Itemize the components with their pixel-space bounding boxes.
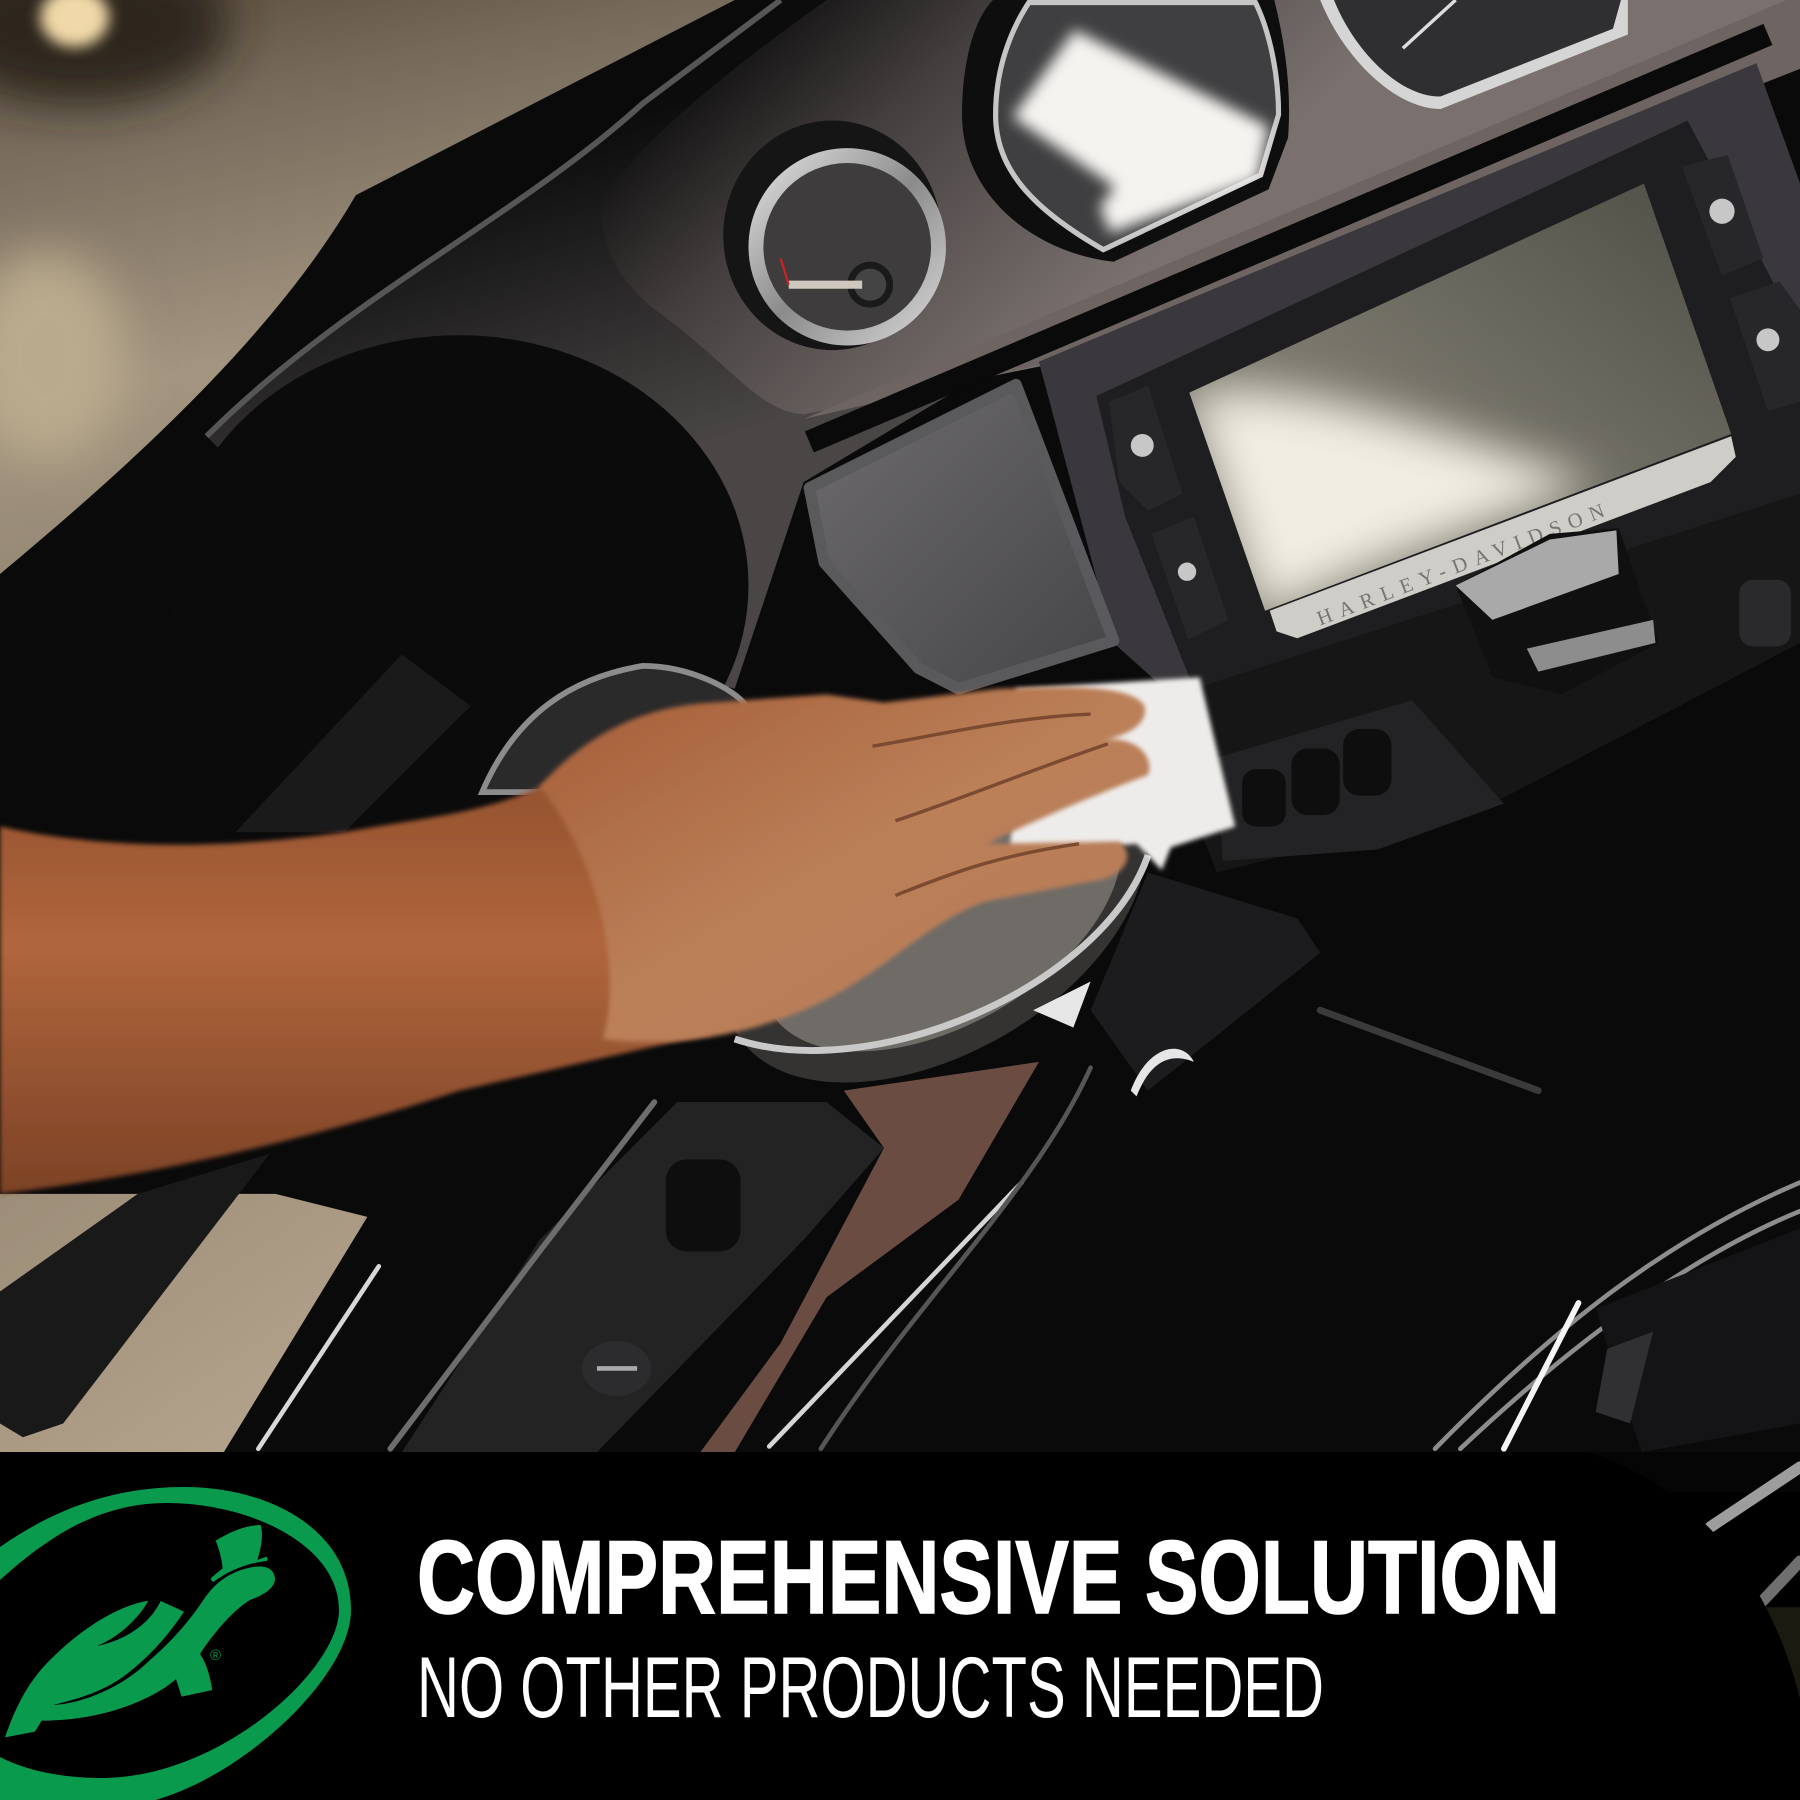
display bezel outer — [1039, 63, 1800, 695]
screen logo strip — [1270, 436, 1736, 638]
screen bezel — [1096, 121, 1800, 689]
logo: green turtle ring — [0, 1487, 351, 1800]
screen glare — [1188, 390, 1596, 614]
arm — [0, 781, 712, 1194]
bright highlight streaks — [258, 1010, 1800, 1601]
trim line — [207, 0, 781, 436]
upper panel — [600, 0, 1800, 414]
left switch housing and chrome bar — [235, 654, 746, 832]
ignition switch chrome — [1456, 528, 1659, 695]
small fuel gauge — [723, 121, 946, 350]
black caption panel — [0, 1452, 1800, 1800]
floor lower left — [0, 1182, 390, 1452]
dark area bottom right — [1722, 1607, 1800, 1800]
control switches — [1242, 580, 1791, 827]
speaker — [170, 335, 748, 836]
screen logo strip: HARLEY-DAVIDSON — [1314, 497, 1615, 630]
black stripe below upper panel — [809, 34, 1768, 442]
top right gauge — [1320, 0, 1628, 109]
screen buttons — [1109, 155, 1800, 639]
right dark reflections — [1504, 1228, 1800, 1452]
central console panel — [402, 1102, 884, 1452]
icon: turtle with top hat — [5, 1525, 275, 1737]
chrome ring around headlight mount — [669, 686, 1202, 1151]
screen — [1189, 184, 1731, 611]
fender chrome — [1033, 872, 1320, 1096]
fairing gray surface — [207, 0, 1033, 689]
white cloth — [1010, 677, 1235, 870]
registered mark: ® — [210, 1647, 221, 1664]
button icons — [1131, 199, 1779, 581]
background wall — [0, 0, 804, 643]
upper right panel strip — [804, 0, 1800, 419]
reflection of hand on tank — [700, 1062, 1039, 1452]
subheading: NO OTHER PRODUCTS NEEDED — [417, 1640, 1324, 1736]
lower right panel — [1148, 494, 1800, 872]
gray lower panel — [809, 385, 1114, 689]
hand — [540, 687, 1149, 1042]
switch plate — [1217, 700, 1504, 861]
finger shadows — [872, 714, 1108, 895]
large speedometer — [962, 0, 1289, 262]
handlebar grip — [0, 1154, 270, 1437]
